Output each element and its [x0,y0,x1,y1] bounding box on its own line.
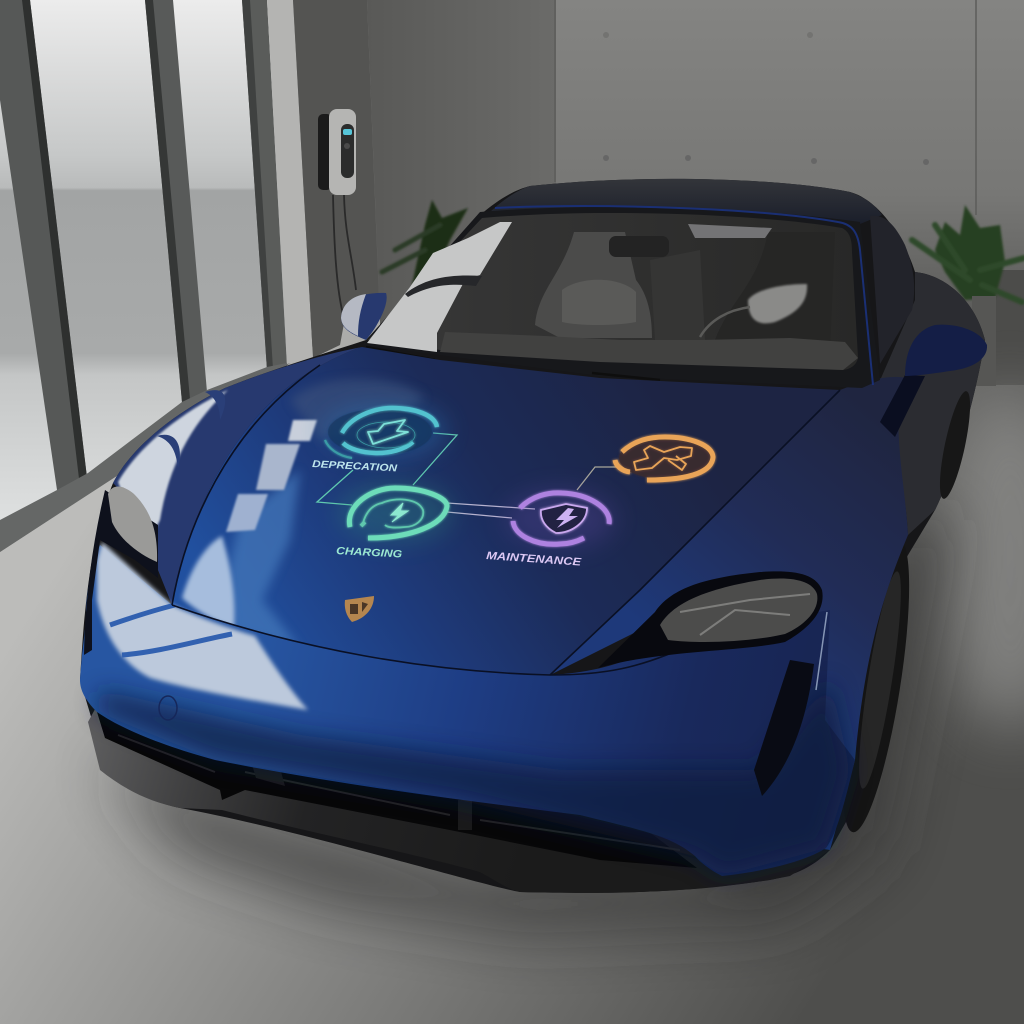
glow: deprecation [323,402,447,458]
lip splitter [88,700,830,893]
hood [172,347,840,675]
windshield glass [367,213,858,370]
dashboard [440,332,858,370]
left fender reflection [118,390,228,530]
glass reflection left [367,222,512,352]
label: charging: CHARGING [336,545,402,560]
label: deprecation: DEPRECATION [312,459,398,474]
fender reflection bands [157,390,225,468]
windshield blue edge [495,206,873,385]
hood seam [172,365,840,675]
concrete wall [0,0,1024,390]
floor [0,300,1024,1024]
right front wheel [829,536,923,836]
left fender [113,347,362,605]
passenger seat [535,232,652,338]
rearview mirror [609,236,669,257]
side wall [293,0,379,358]
bumper lower shadow [97,680,850,876]
glow: maintenance [504,489,616,549]
wiper [366,347,660,380]
left wing mirror [341,293,387,340]
Porsche crest [345,596,374,622]
side vent [754,612,827,796]
label: maintenance: MAINTENANCE [486,550,582,569]
plant right [912,205,1024,386]
projected interface [312,402,713,569]
hood lit reflection [182,379,425,648]
front-right headlight [598,571,823,668]
floor shadow under car [100,520,945,930]
icon: charging ring [349,488,447,538]
bumper [80,545,855,876]
icon: deprecation ring [325,408,437,458]
rear window strip [688,224,772,238]
car body silhouette [80,179,985,893]
rear quarter [878,272,985,535]
floor-to-ceiling window [0,0,292,552]
icon: maintenance ring [513,493,609,544]
right rear wheel [934,389,976,501]
connector lines [317,433,617,518]
car [80,179,987,893]
steering wheel [700,307,750,337]
glow: charging [337,483,453,543]
windshield frame [362,207,880,388]
right fender [550,377,908,850]
bumper reflection [97,542,308,710]
driver seat [715,232,835,350]
center console seat [650,250,705,340]
lower grille [97,712,697,868]
icon: tools ring [615,437,713,480]
front-left headlight [84,486,158,655]
roof [490,179,882,224]
right wing mirror [880,325,987,437]
wall charger [318,109,356,318]
mop reflection [748,284,807,323]
tow hook cover [159,696,177,720]
wall pillar [267,0,313,364]
plant left [382,200,468,285]
side window [870,216,914,364]
